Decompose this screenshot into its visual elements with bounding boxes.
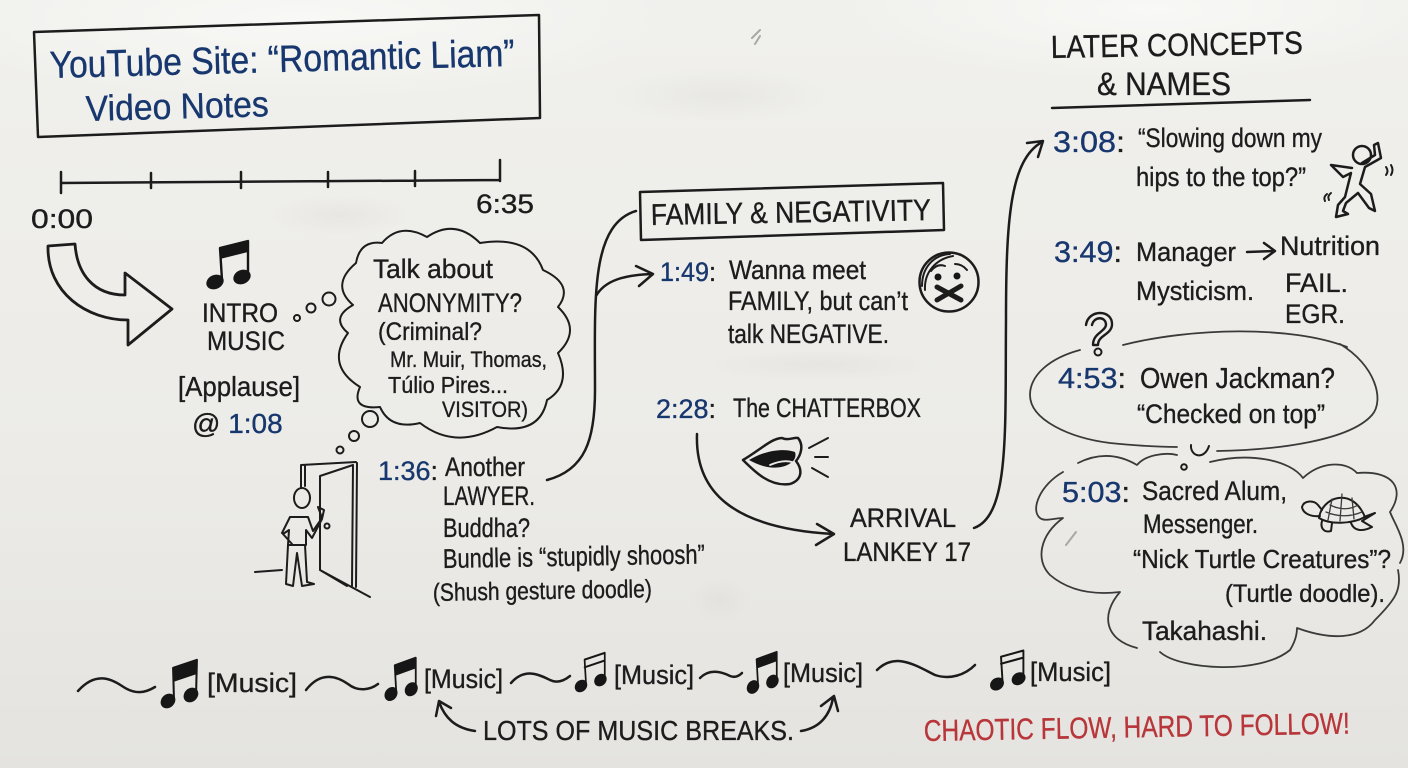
- applause label: [Applause]: [178, 371, 300, 402]
- thought cloud: 5:03: [1036, 454, 1403, 667]
- thought cloud: 5:03: 5:03:: [1062, 477, 1130, 509]
- music break row: [Music]: [614, 660, 694, 690]
- note: 1:36: Another: [445, 452, 525, 482]
- intro music label: [202, 298, 285, 356]
- arrow to arrival: [697, 434, 834, 545]
- thought bubble: anonymity: (Criminal?: [378, 318, 482, 346]
- timeline start label: 0:00: [31, 204, 93, 234]
- note: 3:08: hips to the top?”: [1136, 162, 1306, 192]
- note: 1:36: 1:36:: [378, 456, 438, 486]
- speech oval: 4:53: [1030, 331, 1377, 451]
- heading: later concepts: LATER CONCEPTS: [1050, 25, 1303, 65]
- note: 1:36: (Shush gesture doodle): [433, 575, 652, 607]
- note: 3:49: 3:49:: [1054, 236, 1122, 269]
- thought cloud: 5:03: (Turtle doodle).: [1225, 580, 1385, 608]
- icon: music note 3: [573, 653, 608, 695]
- thought bubble: anonymity: VISITOR): [442, 397, 528, 422]
- icon: music note 5: [988, 651, 1027, 693]
- note: 3:49: FAIL.: [1285, 268, 1348, 298]
- timeline end label: 6:35: [476, 189, 534, 219]
- note: 1:36: [378, 452, 705, 607]
- music break row: [78, 651, 1111, 711]
- thought cloud: 5:03: Sacred Alum,: [1142, 476, 1287, 506]
- note: 1:49: Wanna meet: [729, 255, 866, 285]
- music break row: [Music]: [783, 658, 863, 688]
- icon: dancing figure: [1324, 143, 1392, 217]
- heading: later concepts: [1050, 25, 1310, 108]
- heading: family and negativity: [640, 183, 944, 240]
- note: 1:49: [660, 255, 908, 349]
- icon: music note 1: [159, 660, 200, 711]
- thought cloud: 5:03: Messenger.: [1143, 509, 1258, 539]
- thought bubble: anonymity: [294, 229, 570, 454]
- thought bubble: anonymity: ANONYMITY?: [378, 288, 522, 318]
- thought bubble: anonymity: Túlio Pires...: [388, 372, 508, 398]
- heading: family and negativity: FAMILY & NEGATIVITY: [651, 194, 931, 232]
- note: 3:49: Mysticism.: [1136, 276, 1254, 306]
- note: 3:49: Nutrition: [1280, 231, 1380, 261]
- note: 1:49: 1:49:: [660, 257, 716, 287]
- speech oval: 4:53: 4:53:: [1058, 363, 1126, 395]
- title box: [34, 15, 540, 137]
- heading: later concepts: & NAMES: [1097, 66, 1231, 102]
- thought cloud: 5:03: “Nick Turtle Creatures”?: [1133, 544, 1391, 574]
- timeline: [31, 160, 534, 234]
- music break row: [Music]: [207, 668, 297, 698]
- intro music label: INTRO: [202, 298, 278, 328]
- applause label: [178, 371, 300, 439]
- note: 2:28: The CHATTERBOX: [733, 393, 921, 423]
- applause label: @ 1:08: [192, 408, 283, 439]
- thought bubble: anonymity: Mr. Muir, Thomas,: [390, 347, 547, 372]
- icon: music note 2: [383, 658, 420, 704]
- icon: turtle: [1302, 494, 1375, 531]
- thought cloud: 5:03: Takahashi.: [1142, 616, 1267, 646]
- note: 3:08: 3:08:: [1053, 126, 1125, 159]
- note: lots of music breaks: [436, 696, 838, 746]
- note: 3:49: EGR.: [1285, 299, 1345, 329]
- door and person doodle: [255, 462, 370, 597]
- intro music label: MUSIC: [207, 326, 285, 356]
- note: 1:36: Bundle is “stupidly shoosh”: [443, 539, 705, 574]
- title line 2: Video Notes: [85, 83, 269, 129]
- note: 3:08: “Slowing down my: [1138, 123, 1322, 153]
- icon: music notes intro: [204, 241, 253, 292]
- music break row: [Music]: [424, 664, 503, 694]
- note: 1:49: FAMILY, but can’t: [728, 286, 908, 316]
- note: 3:49: [1054, 231, 1380, 329]
- note: 3:49: Manager: [1136, 237, 1236, 267]
- icon: taped mouth face: [920, 252, 978, 312]
- note: 2:28: 2:28:: [656, 394, 716, 424]
- arrival label: LANKEY 17: [843, 537, 971, 567]
- branching connector from 1:36: [547, 211, 653, 480]
- arrival label: ARRIVAL: [850, 503, 956, 533]
- arrival label: [843, 503, 971, 567]
- title line 1: YouTube Site: “Romantic Liam”: [49, 33, 515, 87]
- note: lots of music breaks: LOTS OF MUSIC BREAKS.: [483, 715, 794, 746]
- icon: music note 4: [745, 652, 780, 696]
- speech oval: 4:53: “Checked on top”: [1137, 399, 1325, 429]
- speech oval: 4:53: Owen Jackman?: [1140, 363, 1335, 395]
- icon: talking mouth: [743, 438, 828, 484]
- note: 1:36: LAWYER.: [443, 481, 535, 511]
- note: 1:49: talk NEGATIVE.: [728, 319, 889, 349]
- connecting bubbles: [1181, 445, 1209, 470]
- note: 2:28: [656, 393, 921, 424]
- music break row: [Music]: [1030, 657, 1111, 687]
- curved arrow to intro: [48, 244, 172, 345]
- note: 3:08: [1053, 123, 1322, 192]
- bubble text: Talk about: [373, 254, 493, 284]
- icon: question mark: [1086, 313, 1112, 356]
- arrow to later concepts: [974, 141, 1043, 528]
- note: 1:36: Buddha?: [443, 513, 530, 543]
